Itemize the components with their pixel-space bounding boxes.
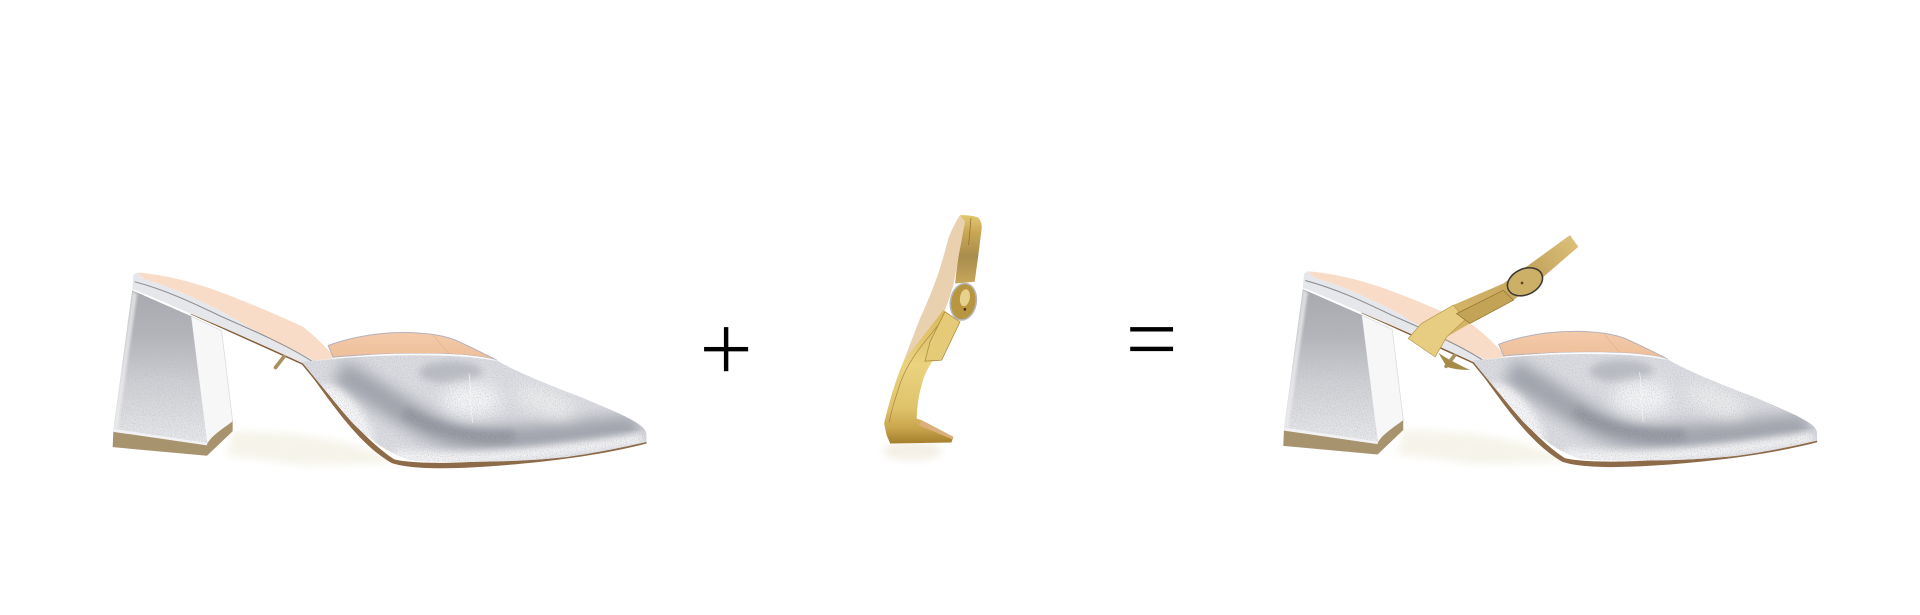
strap upper end <box>955 215 982 283</box>
strap stitching <box>889 322 940 423</box>
plus sign <box>704 327 748 371</box>
equals sign <box>1130 327 1173 351</box>
shoe: silver mule with gold strap <box>1275 235 1832 477</box>
buckle on shoe <box>1503 262 1547 301</box>
strap shadow <box>883 441 942 461</box>
buckle <box>947 281 979 322</box>
toe lining <box>918 420 953 439</box>
gold strap upper <box>1447 235 1578 337</box>
strap backing <box>903 215 965 362</box>
strap tab <box>925 312 960 361</box>
gold ankle strap <box>883 215 982 461</box>
strap keeper <box>1457 290 1513 323</box>
strap lower body <box>884 310 960 443</box>
peach strap backing edge <box>1484 235 1572 300</box>
strap wide end <box>1408 305 1465 357</box>
strap tab under shoe <box>1438 353 1470 370</box>
shoe: silver mule <box>104 273 661 478</box>
